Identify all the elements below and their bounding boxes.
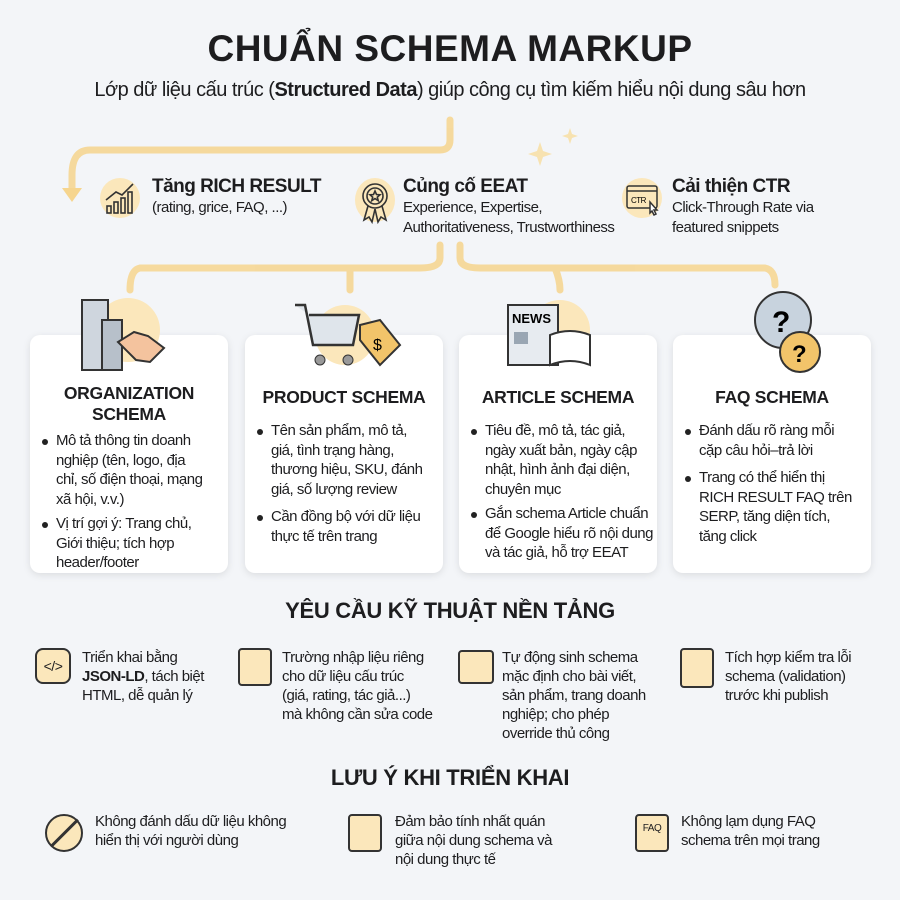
benefit: eeat: Củng cố EEAT [403, 176, 528, 197]
item: auto schema: Tự động sinh schema [502, 649, 638, 666]
section heading: technical: YÊU CẦU KỸ THUẬT NỀN TẢNG [285, 598, 615, 623]
card: organization: nghiệp (tên, logo, địa [56, 452, 185, 468]
card: organization [30, 335, 228, 573]
icon: ctr window: CTR [631, 196, 647, 205]
item: json-ld: JSON-LD, tách biệt [82, 668, 204, 685]
tech items [35, 648, 851, 742]
card: organization: Mô tả thông tin doanh [56, 432, 191, 449]
card: organization: SCHEMA [92, 404, 166, 424]
icon: question bubbles: ? [792, 341, 807, 368]
benefit: eeat [355, 176, 614, 236]
card: article: để Google hiểu rõ nội dung [485, 524, 653, 542]
note 3 [635, 813, 820, 852]
card: faq: tăng click [699, 528, 757, 544]
icon: news [508, 300, 590, 365]
card: organization: header/footer [56, 554, 139, 571]
card: organization: xã hội, v.v.) [56, 490, 124, 508]
card: organization: Giới thiệu; tích hợp [56, 534, 174, 552]
card icons [81, 291, 821, 373]
card: faq: cặp câu hỏi–trả lời [699, 442, 813, 458]
item: auto schema: mặc định cho bài viết, [502, 668, 636, 685]
item: json-ld: HTML, dễ quản lý [82, 687, 192, 704]
item: json-ld: </> [44, 658, 62, 674]
card: faq: SERP, tăng diện tích, [699, 508, 830, 525]
icon: question bubbles [755, 292, 820, 372]
note 1: hiển thị với người dùng [95, 832, 238, 849]
item: auto schema: sản phẩm, trang doanh [502, 687, 646, 704]
card: faq [673, 335, 871, 573]
icon: building handshake [82, 298, 164, 370]
card: product: thương hiệu, SKU, đánh [271, 461, 422, 478]
card: product: giá, tình trạng hàng, [271, 442, 394, 458]
benefit: ctr: featured snippets [672, 219, 779, 236]
benefit: eeat: Experience, Expertise, [403, 199, 542, 216]
card: article: ngày xuất bản, ngày cập [485, 442, 637, 458]
card: product: giá, số lượng review [271, 480, 397, 498]
card: organization: Vị trí gợi ý: Trang chủ, [56, 515, 191, 532]
icon: cart tag [295, 305, 400, 365]
card: article: ARTICLE SCHEMA [482, 387, 634, 407]
section heading: notes: LƯU Ý KHI TRIỂN KHAI [331, 765, 569, 790]
note 2: giữa nội dung schema và [395, 832, 552, 849]
card: article: Gắn schema Article chuẩn [485, 505, 648, 522]
benefit: rich result: (rating, grice, FAQ, ...) [152, 199, 287, 216]
card: article: Tiêu đề, mô tả, tác giả, [485, 422, 625, 439]
notes [45, 813, 820, 868]
benefit: ctr [622, 176, 814, 236]
card: article: chuyên mục [485, 480, 561, 498]
card: article [459, 335, 657, 573]
item: auto schema: nghiệp; cho phép [502, 706, 609, 723]
note 3: Không lạm dụng FAQ [681, 813, 815, 830]
icon: cart tag: $ [373, 337, 382, 354]
card: product: Cần đồng bộ với dữ liệu [271, 508, 420, 525]
item: input fields: (giá, rating, tác giả...) [282, 687, 410, 704]
item: input fields: Trường nhập liệu riêng [282, 649, 424, 666]
card: organization: ORGANIZATION [64, 383, 194, 403]
note 2: Đảm bảo tính nhất quán [395, 813, 545, 830]
note 1: Không đánh dấu dữ liệu không [95, 813, 286, 830]
note 3: FAQ [643, 823, 661, 834]
item: json-ld [35, 648, 204, 704]
benefit: ctr: Click-Through Rate via [672, 199, 814, 216]
icon: news: NEWS [512, 311, 551, 326]
card: article: nhật, hình ảnh đại diện, [485, 461, 630, 478]
card: faq: Đánh dấu rõ ràng mỗi [699, 422, 834, 439]
card: faq: FAQ SCHEMA [715, 387, 829, 407]
item: validation: schema (validation) [725, 668, 846, 685]
note 2 [348, 813, 552, 868]
item: auto schema: override thủ công [502, 725, 609, 742]
item: json-ld: Triển khai bằng [82, 649, 177, 666]
card: product: PRODUCT SCHEMA [262, 387, 426, 407]
card: organization: chỉ, số điện thoại, mạng [56, 471, 202, 488]
icon: question bubbles: ? [772, 306, 790, 339]
subtitle: Lớp dữ liệu cấu trúc (Structured Data) giúp công cụ tìm kiếm hiểu nội dung sâu hơn [94, 79, 806, 101]
icon: badge [355, 178, 395, 222]
card: faq: RICH RESULT FAQ trên [699, 488, 852, 506]
card: product: Tên sản phẩm, mô tả, [271, 422, 407, 439]
item: validation: trước khi publish [725, 687, 828, 704]
note 2: nội dung thực tế [395, 851, 495, 868]
item: input fields: cho dữ liệu cấu trúc [282, 668, 404, 685]
card: product [245, 335, 443, 573]
benefit: eeat: Authoritativeness, Trustworthiness [403, 219, 614, 236]
item: input fields [238, 648, 432, 723]
note 3: schema trên mọi trang [681, 832, 820, 849]
benefit: rich result [100, 176, 322, 218]
item: validation [680, 648, 851, 704]
item: input fields: mà không cần sửa code [282, 706, 432, 723]
card: product: thực tế trên trang [271, 528, 377, 544]
title: CHUẨN SCHEMA MARKUP [207, 28, 692, 69]
icon: chart [100, 178, 140, 218]
note 1 [45, 813, 286, 852]
benefit: rich result: Tăng RICH RESULT [152, 176, 321, 197]
card: faq: Trang có thể hiển thị [699, 469, 825, 486]
card: article: và tác giả, hỗ trợ EEAT [485, 544, 628, 561]
item: validation: Tích hợp kiểm tra lỗi [725, 649, 851, 666]
item: auto schema [458, 649, 646, 742]
benefit: ctr: Cải thiện CTR [672, 176, 790, 197]
icon: ctr window [622, 178, 662, 218]
